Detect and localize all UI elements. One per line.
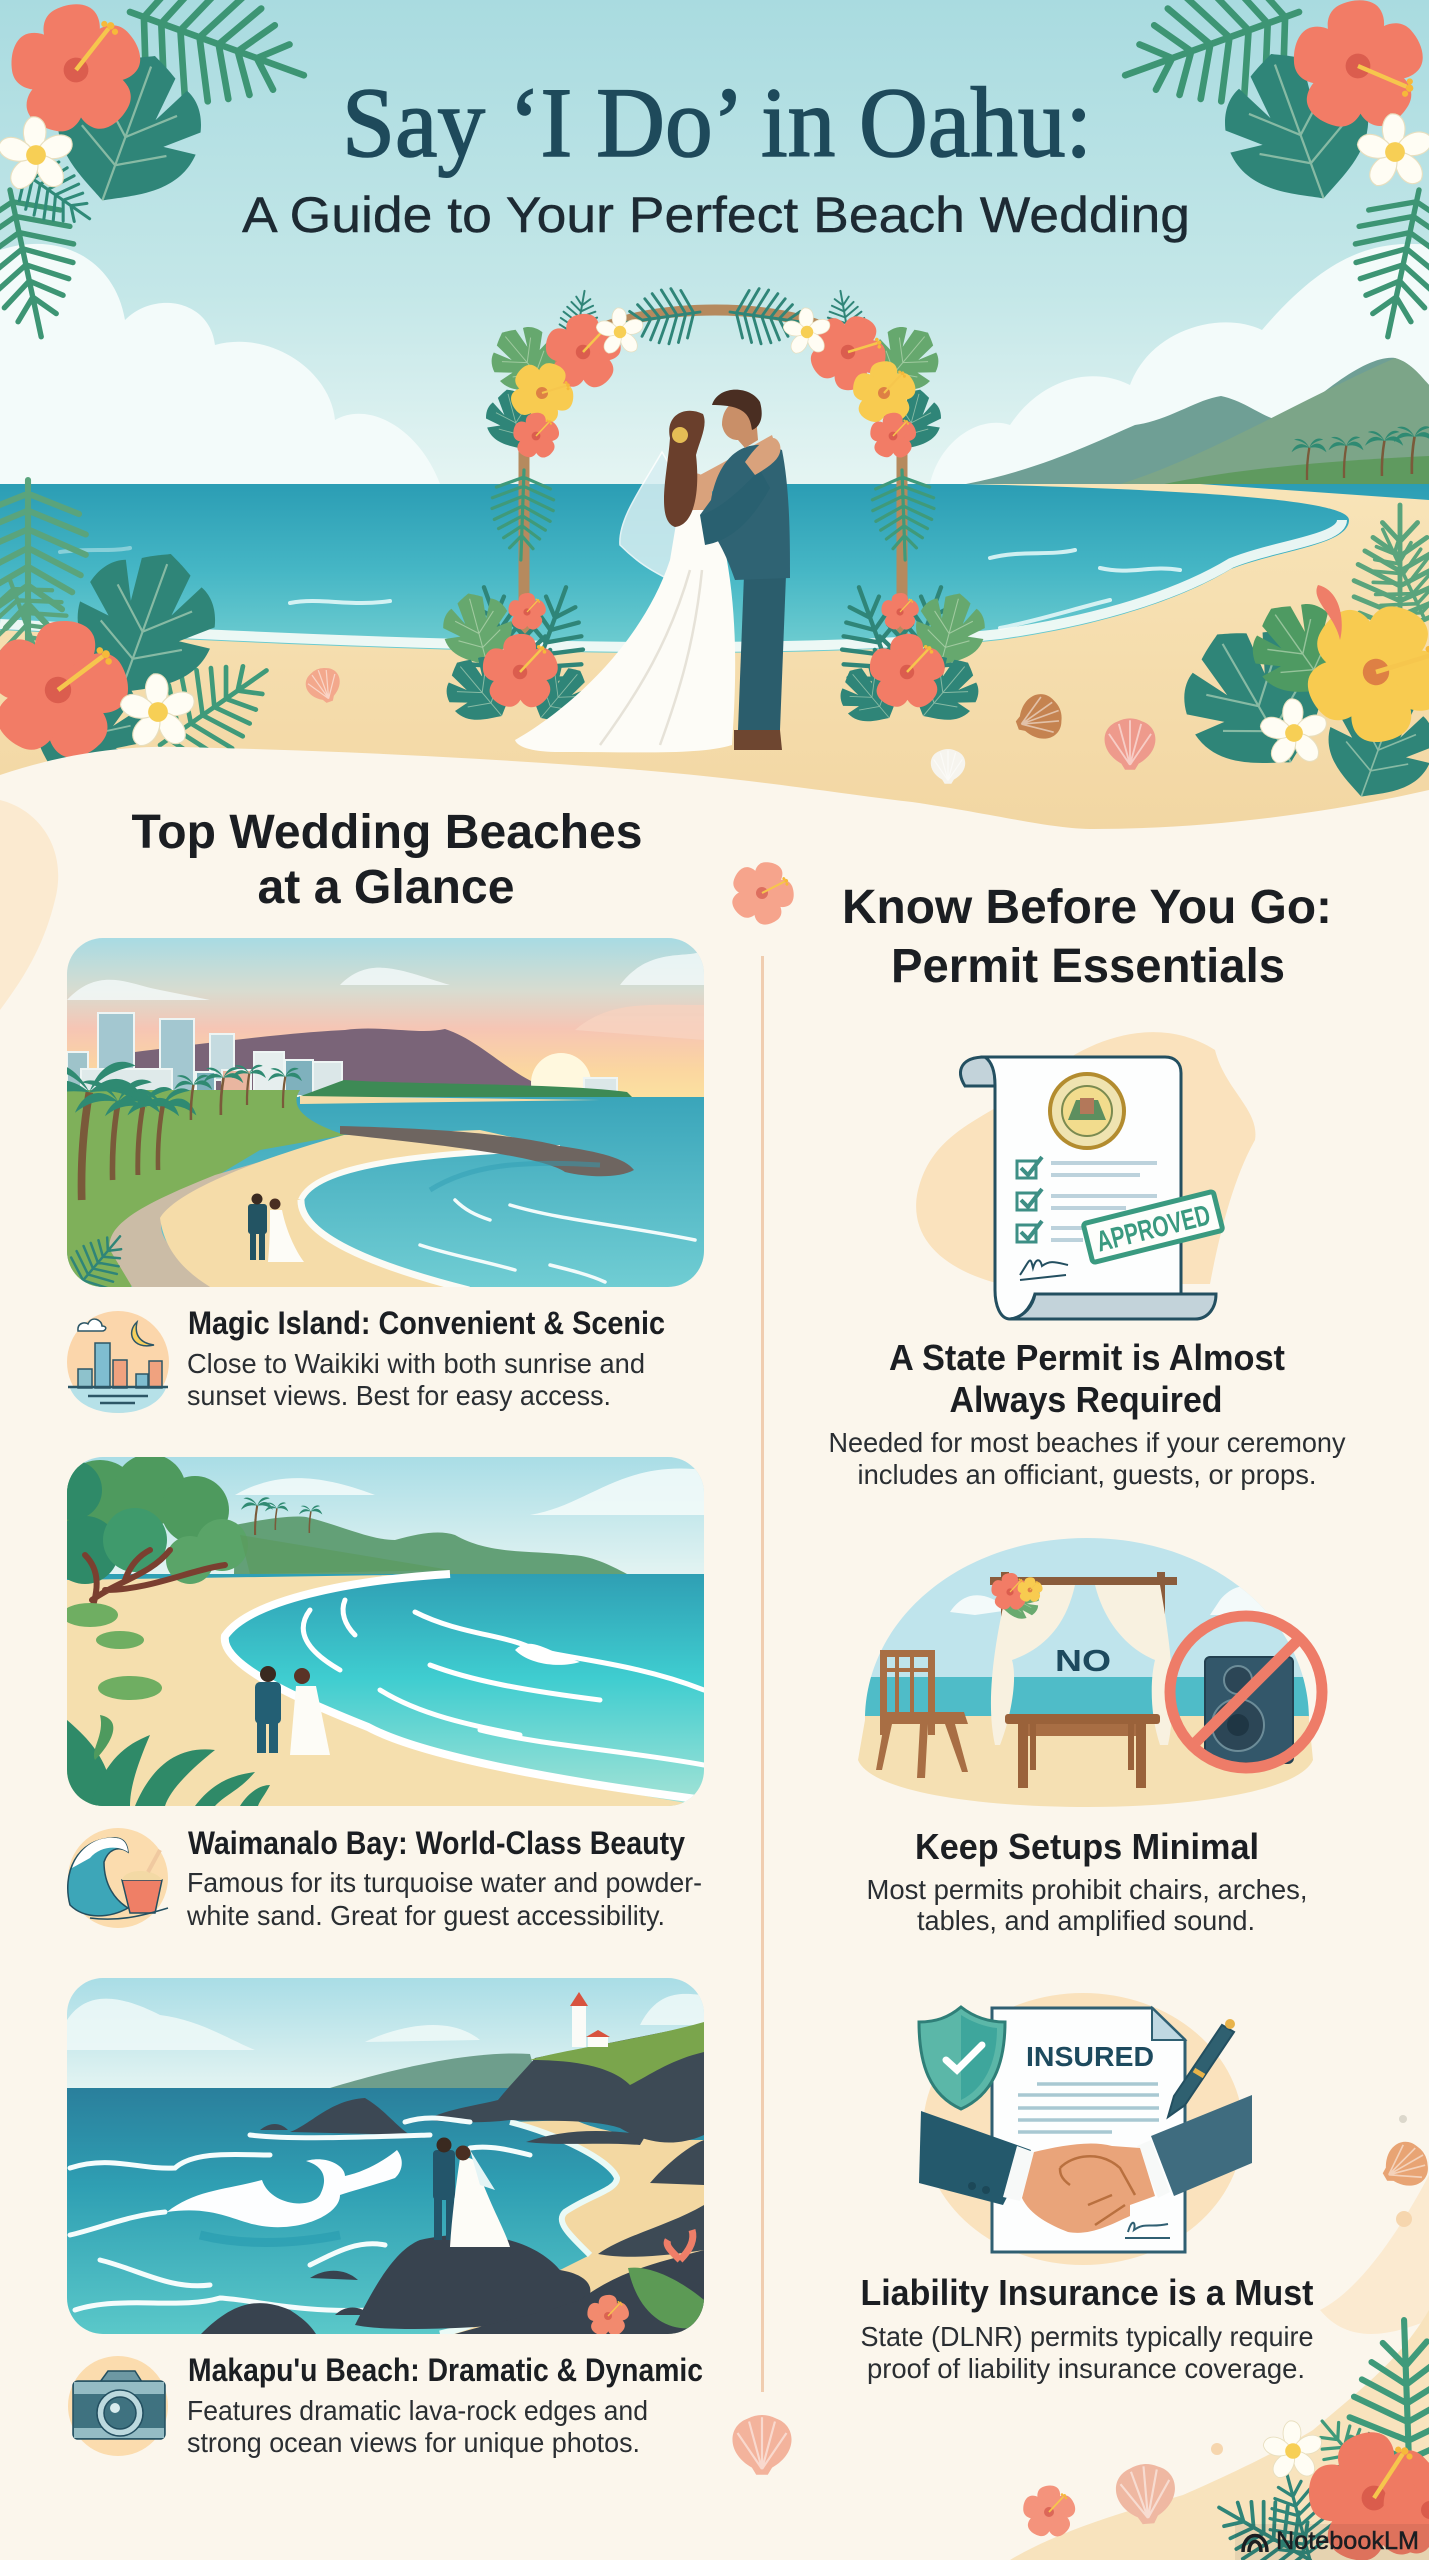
text: liability insurance: State (DLNR) permits typically require xyxy=(860,2321,1314,2352)
text: Makapu'u Beach: Features dramatic lava-rock edges and xyxy=(187,2395,648,2426)
bride back and arm xyxy=(683,473,712,510)
left heading: top wedding beaches: at a Glance xyxy=(258,861,514,914)
seal xyxy=(1050,1074,1124,1148)
arch with curtains xyxy=(989,1572,1177,1745)
top-left foliage xyxy=(0,0,325,347)
illustration: minimal setup xyxy=(850,1530,1322,1811)
text: setups minimal: tables, and amplified sound. xyxy=(917,1905,1255,1936)
text: Makapu'u Beach xyxy=(187,2352,703,2458)
lighthouse xyxy=(570,1992,610,2047)
veil xyxy=(620,452,690,578)
flower arch xyxy=(432,285,993,737)
groom xyxy=(738,575,786,730)
tiny couple xyxy=(433,2138,510,2247)
text: setups minimal: Most permits prohibit chairs, arches, xyxy=(866,1874,1308,1905)
approved stamp: APPROVED xyxy=(1093,1199,1214,1258)
text: Waimanalo Bay: Waimanalo Bay: World-Class Beauty xyxy=(188,1825,685,1861)
text: Makapu'u Beach: Makapu'u Beach: Dramatic & Dynamic xyxy=(188,2352,703,2388)
text: Waimanalo Bay xyxy=(186,1825,702,1931)
tiny couple xyxy=(255,1666,330,1755)
title: Say ‘I Do’ in Oahu: xyxy=(342,67,1092,178)
wave streaks xyxy=(60,548,1180,628)
decorative wash: left edge xyxy=(0,800,58,1010)
text: state permit: A State Permit is Almost xyxy=(889,1337,1285,1378)
table xyxy=(1005,1714,1160,1788)
checklist xyxy=(1017,1157,1157,1280)
shells on sand xyxy=(302,663,1155,784)
icon: city skyline with moon xyxy=(67,1311,169,1413)
dome backdrop xyxy=(850,1530,1320,1811)
surf lines xyxy=(70,2118,530,2311)
text: setups minimal: Keep Setups Minimal xyxy=(915,1826,1259,1867)
breaking wave xyxy=(167,2150,402,2227)
text: Magic Island: sunset views. Best for easy access. xyxy=(187,1380,611,1411)
subtitle: A Guide to Your Perfect Beach Wedding xyxy=(242,187,1190,243)
clouds left xyxy=(0,244,440,484)
text: Makapu'u Beach: strong ocean views for unique photos. xyxy=(187,2427,640,2458)
column divider flower xyxy=(718,851,805,937)
shield xyxy=(919,2007,1005,2109)
icon: wave and bucket xyxy=(68,1828,168,1928)
sand xyxy=(0,484,1429,840)
text: state permit: includes an officiant, guests, or props. xyxy=(858,1459,1316,1490)
text: Waimanalo Bay: white sand. Great for guest accessibility. xyxy=(186,1900,665,1931)
lava rocks xyxy=(355,2235,590,2329)
bottom-right foliage xyxy=(1157,505,1429,815)
text: Magic Island: Close to Waikiki with both sunrise and xyxy=(187,1348,645,1379)
illustration: insurance handshake xyxy=(919,1993,1252,2265)
column divider xyxy=(761,956,764,2392)
wavy cream panel edge xyxy=(0,747,1429,2560)
groom head xyxy=(722,400,758,448)
right heading: permit essentials: Permit Essentials xyxy=(891,940,1285,993)
dune shrubs xyxy=(62,1603,162,1700)
text: Waimanalo Bay: Famous for its turquoise water and powder- xyxy=(187,1867,702,1898)
shoreline foam xyxy=(0,520,1342,647)
icon: camera xyxy=(68,2356,168,2456)
text: Magic Island: Magic Island: Convenient & Scenic xyxy=(188,1305,665,1341)
text: liability insurance: proof of liability insurance coverage. xyxy=(867,2353,1305,2384)
handshake xyxy=(919,2095,1252,2233)
arm around neck xyxy=(745,438,780,475)
text: setups minimal xyxy=(866,1826,1308,1936)
illustration: approved permit scroll xyxy=(916,1032,1255,1319)
bride hair xyxy=(664,411,705,527)
bride dress xyxy=(515,493,735,752)
text: state permit: Needed for most beaches if your ceremony xyxy=(828,1427,1346,1458)
watermark: NotebookLM: NotebookLM xyxy=(1276,2527,1419,2555)
top-right foliage xyxy=(1104,0,1429,347)
text: state permit xyxy=(828,1337,1346,1490)
right heading: permit essentials: Know Before You Go: xyxy=(842,881,1332,934)
text: liability insurance xyxy=(860,2272,1314,2384)
pen xyxy=(1168,2019,1235,2117)
card image: Makapu'u Beach xyxy=(67,1978,704,2339)
tiny couple xyxy=(248,1194,304,1262)
insurance document xyxy=(992,2008,1185,2252)
speaker with prohibition sign xyxy=(1170,1616,1322,1768)
insurance document: INSURED xyxy=(1026,2041,1154,2072)
cliffs xyxy=(425,2024,704,2143)
hero beach scene xyxy=(0,0,1429,840)
approved stamp xyxy=(1083,1191,1223,1263)
card image: Waimanalo Bay xyxy=(42,1454,704,1806)
NO label: NO xyxy=(1055,1643,1111,1678)
text: state permit: Always Required xyxy=(950,1379,1222,1420)
scattered shells and flowers xyxy=(732,2115,1429,2540)
bottom-right sand corner and foliage xyxy=(1010,2175,1429,2560)
cove sand xyxy=(440,2120,704,2334)
left heading: top wedding beaches xyxy=(132,806,642,914)
bottom-left foliage xyxy=(0,480,292,811)
left heading: top wedding beaches: Top Wedding Beaches xyxy=(132,806,642,859)
right heading: permit essentials xyxy=(842,881,1332,993)
couple xyxy=(515,390,790,752)
ocean xyxy=(0,484,1429,674)
title xyxy=(242,67,1190,243)
watermark: NotebookLM xyxy=(1235,2524,1429,2560)
mountains xyxy=(966,358,1429,490)
sky xyxy=(0,0,1429,490)
clouds right xyxy=(930,244,1429,484)
text: Magic Island xyxy=(187,1305,665,1411)
card image: Magic Island xyxy=(67,938,704,1287)
text: liability insurance: Liability Insurance is a Must xyxy=(860,2272,1314,2313)
chair xyxy=(876,1650,968,1778)
